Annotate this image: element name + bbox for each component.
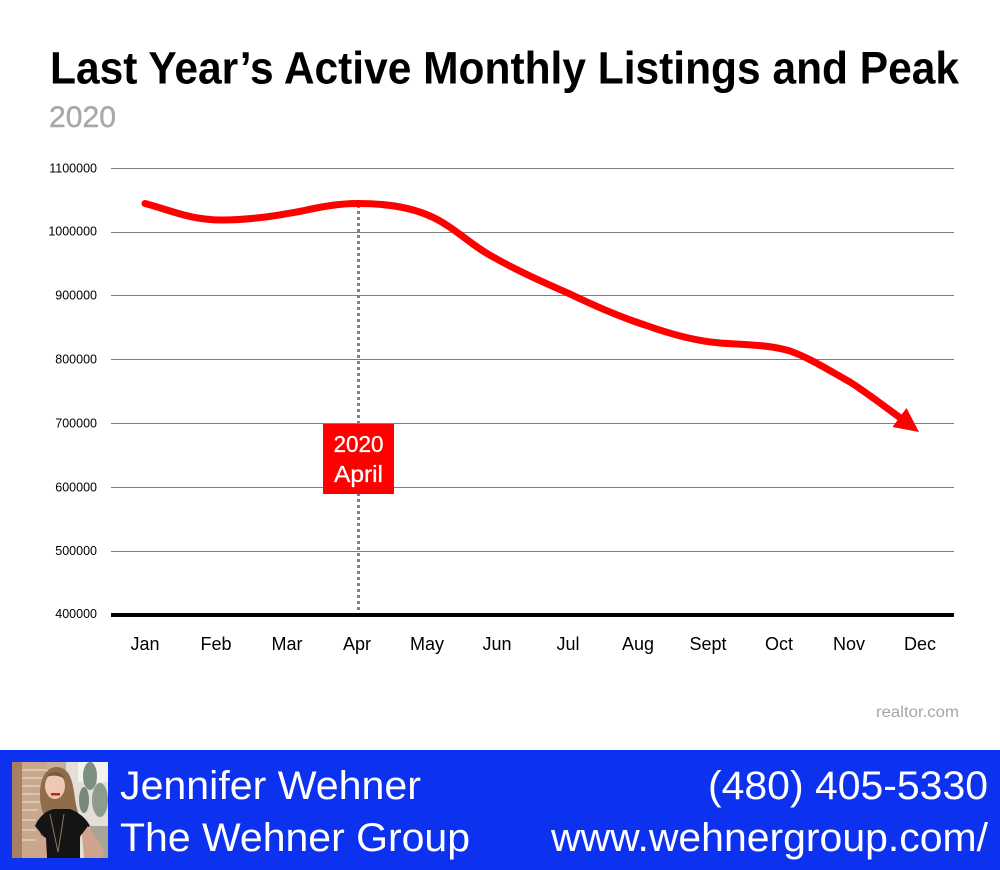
x axis labels (130, 634, 936, 654)
x axis labels: Jul (556, 634, 580, 654)
x axis labels: Sept (689, 634, 727, 654)
callout: 2020 April: 2020 (334, 431, 384, 457)
y axis labels: 500000 (55, 544, 97, 558)
y axis labels: 400000 (55, 607, 97, 621)
y axis labels: 600000 (55, 480, 97, 494)
x axis labels: Nov (833, 634, 865, 654)
x axis labels: Mar (272, 634, 303, 654)
y axis labels: 800000 (55, 352, 97, 366)
contact details (550, 764, 989, 860)
portrait photo (12, 762, 108, 858)
x axis labels: Dec (904, 634, 936, 654)
x axis labels: Apr (343, 634, 371, 654)
y axis labels: 900000 (55, 288, 97, 302)
subtitle: year: 2020 (49, 101, 116, 134)
y axis labels: 1000000 (48, 224, 97, 238)
callout: 2020 April: April (334, 461, 383, 487)
x axis labels: Oct (765, 634, 793, 654)
x axis labels: Aug (622, 634, 654, 654)
red trend line (145, 204, 902, 419)
contact details: (480) 405-5330 (708, 764, 988, 808)
source label: realtor.com (876, 704, 959, 721)
y axis labels: 1100000 (49, 162, 97, 176)
x axis baseline (111, 613, 954, 617)
April peak dotted line (357, 205, 360, 612)
contact details: www.wehnergroup.com/ (550, 816, 989, 860)
x axis labels: Jun (482, 634, 512, 654)
callout: 2020 April (323, 424, 394, 494)
x axis labels: Jan (130, 634, 160, 654)
agent name and group (120, 764, 470, 860)
agent name and group: The Wehner Group (120, 816, 470, 860)
footer banner (0, 750, 1000, 870)
line chart (48, 162, 954, 654)
x axis labels: May (410, 634, 444, 654)
x axis labels: Feb (200, 634, 232, 654)
y axis labels (48, 162, 97, 621)
y axis labels: 700000 (55, 416, 97, 430)
agent name and group: Jennifer Wehner (120, 764, 421, 808)
arrow head (892, 408, 919, 432)
title: Last Year’s Active Monthly Listings and Peak (50, 42, 960, 94)
